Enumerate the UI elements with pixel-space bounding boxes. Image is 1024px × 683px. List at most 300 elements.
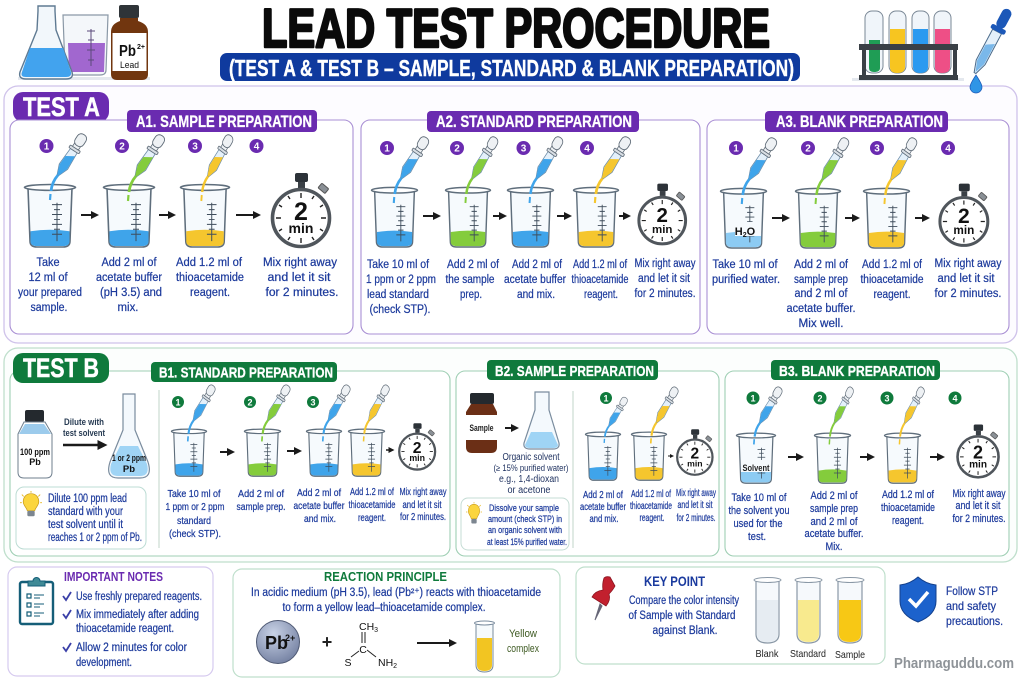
step numbers A1: 2 [119,142,125,152]
text step 1: (check STP). [370,304,430,316]
plus sign: + [322,632,332,652]
timer 2 min: 2 [657,204,668,227]
step numbers B3: 1 [750,394,756,404]
text step 2 [446,259,500,301]
arrow [788,456,798,458]
tube: standard [790,578,826,660]
arrow [386,449,390,451]
beaker step 1 [171,429,207,476]
label: dilute with test solvent: Dilute with [64,417,104,427]
text step 4 [572,259,628,301]
tube: blank [754,578,781,660]
text step 1: (check STP). [169,529,221,540]
icon: Pb2+ ion [256,620,300,664]
callout: dilution tip: Dilute 100 ppm lead [48,493,127,505]
icon: 100 ppm stock bottle [18,410,52,478]
beaker with purified water: H [735,226,743,238]
text step 4 [263,257,338,299]
beaker step 4 [573,187,619,247]
step numbers A2: 2 [454,144,460,154]
text step 3 [676,488,716,524]
text step 4: for 2 minutes. [266,287,338,299]
dropper step 1 [754,385,784,444]
text step 2: sample prep [810,503,858,515]
text step 1: standard [177,516,211,527]
text step 3: thioacetamide [860,274,924,286]
arrow [619,215,625,217]
step numbers A3: 1 [733,144,739,154]
text step 2: Add 2 ml of [102,257,157,269]
text step 4: for 2 minutes. [934,288,1002,300]
arrow [417,642,451,644]
heading: A3 [765,111,948,132]
panel: B1 standard preparation [10,353,450,556]
text step 3: Add 1.2 ml of [882,489,935,501]
step number B2 [600,392,612,404]
text step 2: Add 2 ml of [447,259,500,271]
step numbers A2: 4 [584,144,590,154]
text step 3: for 2 minutes. [676,513,716,524]
text step 2: Add 2 ml of [238,489,284,500]
beaker step 3 [507,187,554,247]
dropper step 3 [884,135,919,204]
text step 4: reagent. [358,513,386,524]
step numbers B3: 3 [884,394,890,404]
text step 2: Mix. [826,541,842,553]
panel: A3 blank preparation [707,111,1009,334]
icon: conical flask, beaker and lead bottle: Lead [120,60,139,70]
icon: conical flask, beaker and lead bottle: 2+ [137,44,145,51]
step numbers B3: 4 [952,394,958,404]
icon: push pin [592,577,615,620]
panel: Test B [4,348,1017,562]
dropper step 2 [651,385,680,443]
text step 1 [366,259,436,316]
text step 3: Add 1.2 ml of [176,257,243,269]
text: reaction description: In acidic medium (pH 3.5), lead (Pb²⁺) reacts with thioacetamide [251,587,541,599]
text step 3: and mix. [517,289,555,301]
step numbers A1: 4 [254,142,260,152]
step numbers A3: 3 [874,144,880,154]
text step 2: Add 1.2 ml of [631,489,671,500]
text step 4: Mix right away [263,257,337,269]
subtitle banner: (TEST A & TEST B – SAMPLE, STANDARD & BLANK PREPARATION) [229,55,794,81]
arrow [287,450,296,452]
timer 2 min: 2 [294,198,308,226]
text step 4: Mix right away [934,258,1002,270]
label: dilute with test solvent [63,417,105,438]
text step 2: Add 2 ml of [794,259,849,271]
arrow [63,444,100,446]
beaker step 4 [348,429,385,476]
text: follow STP: precautions. [946,614,1003,628]
step numbers A2: 1 [384,144,390,154]
arrow [557,215,566,217]
text step 1: purified water. [712,274,780,286]
text step 3: and let it sit [678,500,713,511]
heading: reaction principle: REACTION PRINCIPLE [324,569,447,584]
beaker step 2 [795,188,841,248]
timer 2 min: min [687,458,703,468]
arrow [159,214,170,216]
arrow [505,427,513,429]
step numbers A3: 2 [805,144,811,154]
callout: dissolving tip: at least 15% purified water. [487,537,567,547]
heading: B1: B1. STANDARD PREPARATION [159,364,333,382]
icon: yellow tube [474,621,494,672]
text step 1: 12 ml of [28,272,68,284]
arrow [860,456,869,458]
text step 4: Mix right away [952,488,1006,500]
checklist: thioacetamide reagent. [76,623,174,635]
beaker step 2 [104,184,154,247]
dropper step 4 [595,134,633,203]
text step 1: Take 10 ml of [367,259,430,271]
tube: standard: Standard [790,648,826,660]
label: dilute with test solvent: test solvent [63,428,105,438]
text step 1: 1 ppm or 2 ppm [366,274,436,286]
tube: blank: Blank [756,648,779,660]
beaker step 2 [631,432,667,480]
text: organic solvent: (≥ 15% purified water) [494,463,568,473]
panel: B3 blank preparation [725,360,1009,556]
text step 1: Take 10 ml of [732,492,787,504]
arrow [220,451,229,453]
text step 4: reagent. [584,289,618,301]
beaker with purified water [720,188,767,248]
text step 1: test. [748,531,766,543]
panel: B2 sample preparation [456,360,719,556]
step numbers A2: 3 [521,144,527,154]
callout: dilution tip: test solvent until it [48,519,124,531]
text step 2: sample prep [794,274,848,286]
arrow [423,215,435,217]
thioacetamide structure: NH [378,657,393,669]
panel: A2 standard preparation [361,111,700,334]
timer 2 min [399,423,435,470]
dropper step 1 [188,383,217,441]
text step 2: the sample [446,274,494,286]
arrow [930,456,939,458]
text step 2 [96,257,162,314]
text step 4: Add 1.2 ml of [350,487,394,498]
step numbers B3: 2 [817,394,823,404]
icon: volumetric flask [109,394,149,478]
label: yellow complex: Yellow [509,628,537,640]
text step 1: Take 10 ml of [712,259,778,271]
text step 1: lead standard [367,289,429,301]
icon: conical flask with solvent [524,392,559,449]
timer 2 min: min [969,460,987,471]
text step 5: for 2 minutes. [634,288,696,300]
thioacetamide structure: C [359,644,367,656]
timer 2 min: 2 [958,205,970,228]
beaker step 3 [306,429,342,476]
timer 2 min: min [652,224,672,236]
icon: volumetric flask: Pb [123,464,135,475]
text step 2 [786,259,856,330]
callout: dissolving tip: amount (check STP) in [488,514,562,524]
beaker step 1 [24,184,76,247]
callout: dilution tip: reaches 1 or 2 ppm of Pb. [48,532,142,544]
text step 5: Mix right away [400,487,446,498]
text: follow STP [946,584,1003,628]
text step 5: and let it sit [402,500,442,511]
timer 2 min [639,184,686,244]
text step 2: (pH 3.5) and [100,287,162,299]
text step 2: prep. [460,289,482,301]
text step 2 [236,489,286,513]
callout: dilution tip: standard with your [48,506,123,518]
thioacetamide structure: 2 [393,663,397,670]
timer 2 min [940,184,988,245]
text step 3: Add 1.2 ml of [862,259,923,271]
dropper step 2 [829,385,855,444]
beaker step 1 [371,187,418,247]
text step 3: thioacetamide [176,272,244,284]
icon: volumetric flask: 1 or 2 ppm [112,453,146,463]
text step 3: acetate buffer [504,274,566,286]
text step 3: acetate buffer [294,501,345,512]
icon: 100 ppm stock bottle: Pb [29,457,41,467]
beaker with solvent: Solvent [742,463,770,474]
text: reaction description [251,587,541,614]
step numbers A3 [729,141,955,155]
dropper step 3 [899,385,926,444]
text step 3: thioacetamide [881,502,935,514]
tube: sample [835,578,865,661]
arrow [845,217,854,219]
step numbers A2 [380,141,594,155]
text step 2: Add 2 ml of [810,490,858,502]
step numbers B1: 3 [310,398,316,408]
heading: B2 [487,360,658,380]
text step 3 [881,489,935,527]
thioacetamide structure: S [344,657,352,669]
thioacetamide structure: CH [359,621,374,633]
beaker step 2 [244,429,281,476]
heading: B1 [151,362,337,382]
label: yellow complex: complex [507,643,539,655]
timer 2 min [677,429,713,475]
heading: A1: A1. SAMPLE PREPARATION [136,112,312,131]
text: key point: of Sample with Standard [628,610,736,622]
dropper step 1 [742,135,779,204]
callout: dilution tip [16,487,146,549]
icon: clipboard [20,578,53,624]
checklist: development. [76,657,132,669]
beaker step 2 [445,187,491,247]
step numbers A1: 1 [44,142,50,152]
arrow [668,455,671,457]
beaker with solvent [736,433,776,483]
panel: key point [576,567,885,664]
timer 2 min: 2 [691,445,699,462]
text step 1: acetate buffer [580,502,626,513]
beaker step 2 [814,433,851,483]
text step 2 [630,489,672,524]
text step 3: reagent. [892,515,924,527]
step numbers B3 [746,392,962,404]
timer 2 min [272,173,330,246]
panel: important notes [8,567,213,676]
text step 1: used for the [734,518,782,530]
badge: Test B: TEST B [23,353,99,383]
text step 1 [728,492,790,543]
text step 1: 1 ppm or 2 ppm [166,502,224,513]
dropper step 1 [394,134,431,203]
dropper step 1 [604,396,629,443]
text: organic solvent: or acetone [508,485,551,496]
text step 1: Add 2 ml of [583,490,623,501]
panel: Test A [4,86,1017,343]
text: key point [628,595,739,637]
text step 5 [400,487,446,523]
callout: dissolving tip [461,498,569,550]
text: key point: against Blank. [652,625,718,637]
text step 5 [634,258,696,300]
text step 1: Take [36,257,60,269]
heading: B3: B3. BLANK PREPARATION [779,363,935,380]
dropper step 1 [50,131,89,200]
text step 1: the solvent you [728,505,790,517]
icon: Pb2+ ion: 2+ [285,633,295,643]
icon: sample bottle: Sample [470,423,494,433]
dropper step 3 [201,132,235,201]
text step 4: and let it sit [956,500,1000,512]
checklist: Allow 2 minutes for color [76,642,187,654]
arrow [81,214,93,216]
text step 2 [804,490,864,553]
text: organic solvent: Organic solvent [502,452,560,463]
timer 2 min: 2 [413,440,422,457]
heading: important notes: IMPORTANT NOTES [64,569,163,584]
text step 5: Mix right away [634,258,696,270]
text step 3: Add 2 ml of [512,259,563,271]
text step 2: Mix well. [798,318,844,330]
text step 4 [952,488,1006,525]
heading: A1 [127,110,317,132]
text: follow STP: and safety [946,599,996,613]
beaker step 3 [863,188,910,248]
text step 3: reagent. [190,287,230,299]
checklist: Mix immediately after adding [76,609,199,621]
step numbers B1 [172,396,319,408]
dropper step 2 [128,132,167,201]
dropper step 3 [323,383,352,441]
checklist [63,591,202,669]
step numbers A1 [40,139,264,153]
callout: dissolving tip: an organic solvent with [488,525,562,535]
text step 1: your prepared [18,287,82,299]
text step 1 [580,490,626,525]
text step 4: thioacetamide [348,500,396,511]
heading: B2: B2. SAMPLE PREPARATION [495,363,654,380]
callout: dissolving tip: Dissolve your sample [489,503,559,513]
text step 3: and mix. [304,514,336,525]
text step 3: Add 2 ml of [297,488,341,499]
text step 2: reagent. [640,513,664,524]
text step 2: sample prep. [236,502,286,513]
dropper step 4 [364,383,391,441]
dropper step 3 [530,134,565,203]
step numbers B1: 2 [247,398,253,408]
step numbers A3: 4 [945,144,951,154]
timer 2 min [958,424,999,477]
dropper step 2 [465,134,500,203]
text step 3 [294,488,345,525]
beaker with purified water: 2 [743,232,747,239]
arrow [915,217,924,219]
dropper step 2 [262,383,292,441]
text step 2: thioacetamide [630,501,672,512]
heading: A2: A2. STANDARD PREPARATION [436,112,632,131]
beaker with purified water: O [747,226,756,238]
text step 4 [934,258,1002,300]
heading: key point: KEY POINT [644,573,705,589]
text: key point: Compare the color intensity [629,595,739,607]
arrow [772,217,784,219]
icon: safety shield [900,577,936,622]
timer 2 min: 2 [973,442,983,462]
beaker step 1 [585,432,621,480]
text step 2: and 2 ml of [810,516,858,528]
heading: A3: A3. BLANK PREPARATION [776,112,943,131]
text step 4: and let it sit [268,272,331,284]
arrow [493,215,501,217]
text step 3 [504,259,566,301]
text step 1: sample. [30,302,68,314]
timer 2 min: min [953,224,974,237]
text step 2: mix. [118,302,138,314]
checklist: Use freshly prepared reagents. [76,591,202,603]
text step 1: Take 10 ml of [168,489,221,500]
text step 3 [176,257,244,299]
timer 2 min: min [289,220,313,236]
step numbers A1: 3 [192,142,198,152]
icon: sample bottle [466,393,497,453]
tube: sample: Sample [835,649,865,661]
arrow [236,214,255,216]
icon: 100 ppm stock bottle: 100 ppm [20,447,50,457]
text step 3 [860,259,924,301]
text step 4: and let it sit [938,273,995,285]
text step 2: acetate buffer. [804,528,864,540]
label: yellow complex [507,628,539,655]
beaker step 3 [180,184,230,247]
text step 5: for 2 minutes. [400,512,446,523]
text step 4: Add 1.2 ml of [573,259,628,271]
step number B2: 1 [603,394,609,404]
text step 1 [18,257,82,314]
icon: conical flask, beaker and lead bottle: Pb [119,43,136,60]
text: organic solvent: e.g., 1,4-dioxan [499,474,559,485]
text: organic solvent [494,452,568,496]
text step 3: Mix right away [676,488,716,499]
text: reaction description: to form a yellow lead–thioacetamide complex. [282,602,486,614]
text step 4 [348,487,396,524]
icon: test tube rack and dropper [852,6,1016,93]
timer 2 min: min [409,453,425,463]
text step 1 [712,259,780,286]
dropper step 2 [816,135,851,204]
panel: A1 sample preparation [10,110,353,334]
text: follow STP: Follow STP [946,584,998,598]
text step 2: acetate buffer. [786,303,856,315]
icon: Pb2+ ion: Pb [265,633,288,653]
beaker step 3 [884,433,921,483]
text step 5: and let it sit [638,273,691,285]
